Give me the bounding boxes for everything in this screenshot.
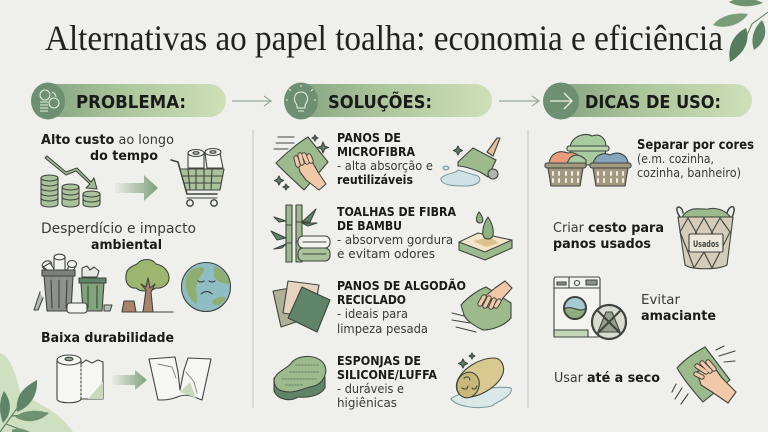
- text: desperdício: Desperdício e impacto: [41, 221, 196, 237]
- text: esponjas: ESPONJAS DE: [337, 353, 421, 368]
- text: toalhas de fibra: DE BAMBU: [337, 218, 402, 233]
- heading: dicas de uso: DICAS DE USO:: [585, 93, 721, 113]
- text: alto custo: [41, 132, 174, 164]
- text: panos de algodão: PANOS DE ALGODÃO: [337, 278, 466, 293]
- text: panos de microfibra: - alta absorção e: [337, 159, 433, 174]
- text: evitar amaciante: amaciante: [641, 308, 716, 324]
- panel: soluções: [271, 130, 512, 411]
- decoration: bottom-left leaves: [0, 353, 73, 432]
- icon: torn paper: [149, 357, 211, 400]
- label: usados: Usados: [693, 240, 719, 250]
- text: esponjas: [337, 353, 437, 411]
- text: panos de microfibra: reutilizáveis: [337, 173, 413, 188]
- text: panos de algodão: [337, 278, 466, 337]
- arrow: cost to cart: [115, 175, 158, 201]
- column dividers: [253, 130, 528, 408]
- text: evitar amaciante: Evitar: [641, 292, 680, 308]
- text: panos de algodão: RECICLADO: [337, 292, 406, 307]
- panel: problema: [34, 132, 230, 403]
- icon: silicone sponge: [274, 356, 326, 400]
- text: panos de microfibra: [337, 130, 433, 188]
- text: evitar amaciante: [641, 292, 716, 324]
- icon: trash cans: [34, 254, 112, 313]
- text: usar até a seco: Usar até a seco: [554, 370, 660, 386]
- header: problema: [31, 82, 226, 120]
- text: toalhas de fibra: - absorvem gordura: [337, 233, 453, 248]
- text: toalhas de fibra: TOALHAS DE FIBRA: [337, 204, 456, 219]
- icon: hand on cloth: [452, 281, 512, 332]
- text: desperdício: ambiental: [91, 237, 162, 253]
- decoration: top-right leaves: [713, 0, 768, 62]
- icon: paper roll: [57, 355, 103, 403]
- text: criar cesto: panos usados: [553, 236, 651, 252]
- text: criar cesto: Criar cesto para: [553, 220, 664, 236]
- icon: used cloths basket: [677, 207, 734, 269]
- text: panos de algodão: limpeza pesada: [337, 322, 428, 337]
- title: Alternativas ao papel toalha: economia e eficiência: [45, 18, 723, 58]
- heading: problema: PROBLEMA:: [76, 93, 186, 113]
- text: panos de algodão: - ideais para: [337, 307, 408, 322]
- panel: dicas de uso: [545, 134, 754, 404]
- arrow: roll to torn paper: [112, 370, 147, 390]
- text: separar por cores: [637, 138, 754, 180]
- text: esponjas: - duráveis e: [337, 382, 404, 397]
- text: esponjas: higiênicas: [337, 396, 397, 411]
- arrow: problema to soluções: [232, 96, 271, 106]
- text: toalhas de fibra: e evitam odores: [337, 247, 435, 262]
- header: soluções: [284, 82, 492, 120]
- icon: coins with falling arrow: [41, 156, 100, 207]
- icon: cloth wiping spill: [441, 138, 500, 186]
- text: criar cesto: [553, 220, 664, 252]
- text: desperdício: [41, 221, 196, 253]
- icon: microfiber cloth with hand: [274, 135, 328, 190]
- icon: washing machine and no softener: [554, 277, 626, 339]
- icon: bamboo and towels: [271, 205, 330, 262]
- text: esponjas: SILICONE/LUFFA: [337, 367, 437, 382]
- icon: tree and stump: [122, 260, 173, 312]
- icon: laundry baskets: [545, 134, 631, 186]
- text: baixa durabilidade: Baixa durabilidade: [41, 330, 174, 346]
- icon: light bulb: [286, 85, 316, 111]
- icon: water drop on towel: [459, 212, 512, 260]
- icon: luffa sponge: [451, 353, 511, 408]
- heading: soluções: SOLUÇÕES:: [328, 90, 432, 113]
- text: separar por cores: Separar por cores: [637, 138, 754, 153]
- text: separar por cores: cozinha, banheiro): [637, 165, 741, 180]
- text: alto custo: Alto custo ao longo: [41, 132, 174, 148]
- icon: arrow: [550, 93, 572, 109]
- text: separar por cores: (e.m. cozinha,: [637, 151, 714, 166]
- icon: sad earth: [182, 262, 230, 312]
- icon: hand drying towel: [672, 346, 736, 404]
- text: alto custo: do tempo: [90, 148, 158, 164]
- icon: coins and money: [40, 90, 59, 111]
- text: toalhas de fibra: [337, 204, 456, 262]
- text: panos de microfibra: PANOS DE: [337, 130, 401, 145]
- text: panos de microfibra: MICROFIBRA: [337, 144, 415, 159]
- icon: stacked cotton cloths: [273, 281, 330, 332]
- arrow: soluções to dicas: [499, 96, 539, 106]
- header: dicas de uso: [543, 82, 752, 120]
- icon: shopping cart with rolls: [171, 148, 224, 206]
